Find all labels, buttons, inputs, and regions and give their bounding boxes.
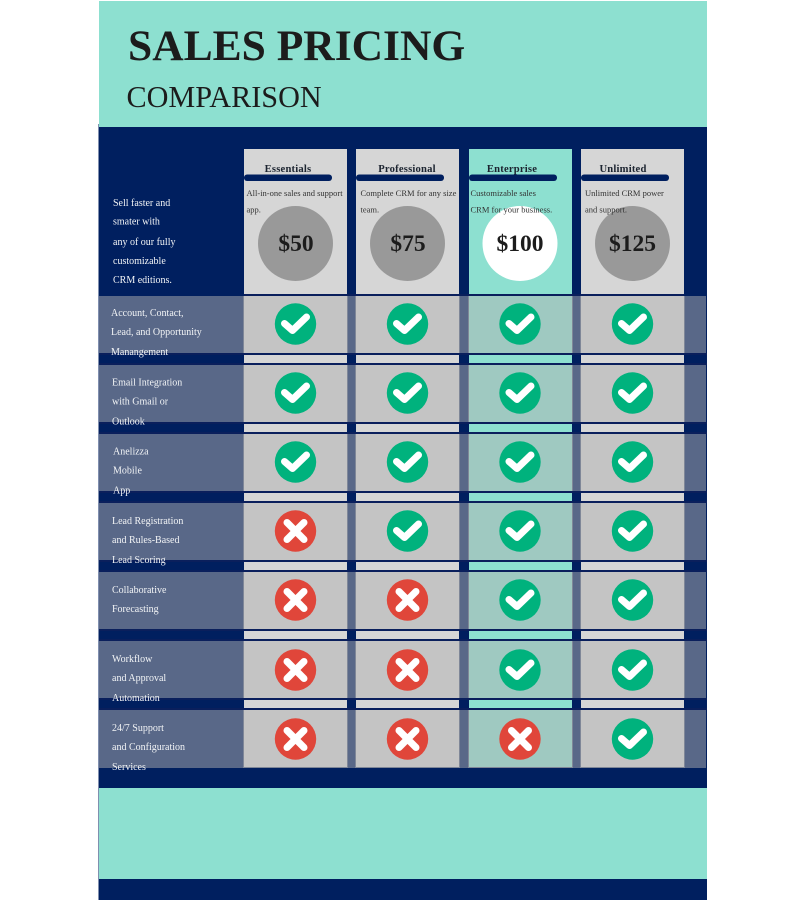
row 7: 24/7 Support and Configuration Services: Services [112, 762, 146, 773]
row 7: 24/7 Support and Configuration Services: and Configuration [112, 742, 185, 753]
plan: Essentials: All-in-one sales and support [246, 188, 343, 198]
row 6: Workflow and Approval Automation: and Approval [112, 673, 166, 684]
intro text: customizable [113, 256, 166, 267]
row 2: Email Integration with Gmail or Outlook: with Gmail or [112, 396, 169, 408]
row 7: 24/7 Support and Configuration Services: 24/7 Support [112, 723, 164, 734]
row 2: Email Integration with Gmail or Outlook: Email Integration [112, 378, 182, 388]
row 3: Anelizza Mobile App [113, 441, 653, 496]
subtitle: COMPARISON [126, 80, 322, 114]
intro text [113, 198, 176, 286]
card edges [244, 296, 684, 768]
plan: Essentials [244, 164, 343, 281]
intro text: any of our fully [113, 237, 176, 248]
row 7: 24/7 Support and Configuration Services [112, 718, 653, 773]
plan: Professional: Complete CRM for any size [360, 188, 457, 198]
row 6: Workflow and Approval Automation [112, 649, 653, 704]
row 6: Workflow and Approval Automation: Workflow [112, 654, 153, 665]
plan: Enterprise: CRM for your business. [470, 204, 552, 214]
intro text: CRM editions. [113, 275, 172, 286]
plan: Unlimited: and support. [585, 204, 627, 214]
row 1: Account, Contact, Lead, and Opportunity Manangement: Account, Contact, [111, 308, 183, 319]
plan: Professional [356, 164, 457, 281]
intro text: Sell faster and [113, 198, 170, 209]
row dividers [99, 294, 707, 710]
row 3: Anelizza Mobile App: Anelizza [113, 446, 149, 458]
plan: Enterprise: Customizable sales [470, 188, 536, 198]
plan: Essentials: $50 [278, 231, 314, 257]
header band [99, 1, 707, 127]
title: SALES PRICING [128, 22, 465, 70]
navy background panel [98, 124, 707, 900]
row 3: Anelizza Mobile App: App [113, 486, 130, 496]
plan: Enterprise: $100 [496, 231, 544, 257]
plan: Unlimited: Unlimited CRM power [585, 188, 664, 198]
row 2: Email Integration with Gmail or Outlook: Outlook [112, 416, 145, 428]
row 5: Collaborative Forecasting [112, 579, 653, 621]
row 1: Account, Contact, Lead, and Opportunity Manangement: Lead, and Opportunity [111, 327, 202, 338]
row 6: Workflow and Approval Automation: Automation [112, 693, 160, 704]
plan: Unlimited: Unlimited [599, 164, 647, 175]
row 1: Account, Contact, Lead, and Opportunity Manangement: Manangement [111, 347, 168, 358]
plan: Essentials: Essentials [265, 164, 311, 175]
plan: Unlimited: $125 [609, 231, 656, 257]
row 4: Lead Registration and Rules-Based Lead Scoring: and Rules-Based [112, 535, 180, 546]
row 4: Lead Registration and Rules-Based Lead Scoring [112, 510, 653, 566]
row 2: Email Integration with Gmail or Outlook [112, 372, 653, 428]
plan: Professional: team. [360, 204, 379, 214]
plan: Enterprise [469, 164, 558, 281]
plan: Professional: $75 [390, 231, 426, 257]
row 5: Collaborative Forecasting: Collaborative [112, 585, 167, 596]
plan: Unlimited [581, 164, 670, 281]
row 3: Anelizza Mobile App: Mobile [113, 466, 142, 476]
footer band [99, 788, 707, 879]
panel: plan cards backing [244, 149, 684, 767]
intro text: smater with [113, 216, 160, 228]
row 4: Lead Registration and Rules-Based Lead Scoring: Lead Registration [112, 516, 183, 527]
row 5: Collaborative Forecasting: Forecasting [112, 604, 159, 615]
plan: Enterprise: Enterprise [487, 164, 537, 175]
plan: Essentials: app. [246, 204, 261, 214]
row 1: Account, Contact, Lead, and Opportunity Manangement [111, 303, 653, 358]
plan: Professional: Professional [378, 164, 436, 175]
row 4: Lead Registration and Rules-Based Lead Scoring: Lead Scoring [112, 555, 166, 566]
row overlays [99, 296, 706, 768]
